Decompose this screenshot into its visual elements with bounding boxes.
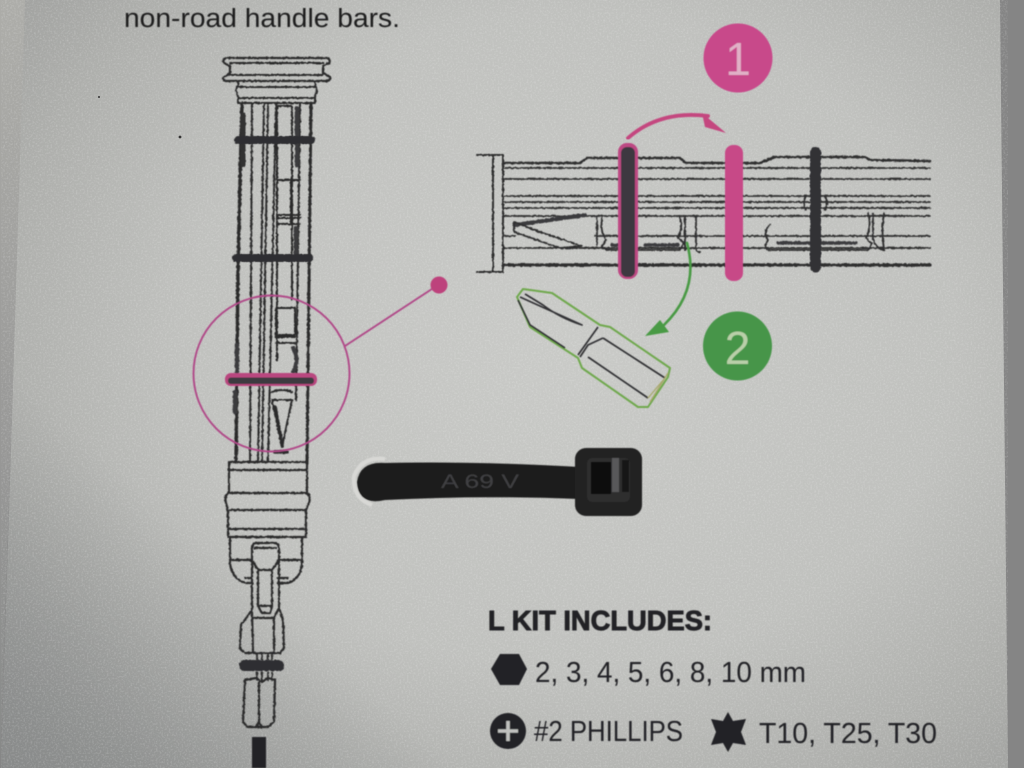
tool collar [225, 462, 310, 583]
rubber band: lower [239, 660, 284, 671]
bit with green outline [517, 289, 670, 407]
strap [357, 462, 580, 501]
icon: hex [491, 654, 527, 685]
rubber band: middle [232, 254, 313, 262]
step badge 2: 2 [725, 322, 750, 374]
icon: phillips [490, 713, 526, 749]
step badge 1 [704, 24, 772, 92]
tool body [235, 103, 311, 462]
black band on bar [810, 147, 821, 272]
step badge 2 [703, 312, 772, 380]
specks [98, 96, 181, 138]
bit details [515, 215, 585, 225]
kit contents [488, 605, 937, 752]
black bar at bottom [252, 737, 266, 768]
tie head [575, 448, 642, 516]
horizontal tool detail [477, 155, 930, 272]
long rails [505, 157, 930, 163]
die-cut recess [354, 459, 385, 505]
rubber band: highlighted pink [225, 373, 317, 386]
kit heading: L KIT INCLUDES: [488, 605, 712, 636]
bit holder [240, 543, 284, 653]
cable tie sample [354, 448, 642, 516]
torx sizes: T10, T25, T30 [759, 718, 937, 750]
step badge 1: 1 [725, 33, 751, 85]
hex bit [243, 653, 275, 727]
tool illustration: vertical multi-tool [223, 58, 330, 727]
pink band on bar (new position) [725, 145, 743, 281]
hex sizes: 2, 3, 4, 5, 6, 8, 10 mm [535, 657, 806, 689]
icon: torx [711, 712, 746, 752]
end cap [477, 155, 503, 272]
pink band on bar (old position) [618, 143, 638, 279]
arrow 1: pink band move [628, 113, 726, 138]
tool head [223, 58, 330, 103]
phillips label: #2 PHILLIPS [534, 716, 683, 748]
arrow 2: green bit insert [645, 243, 690, 336]
strap marking: A 69 V [441, 472, 519, 493]
rubber band: top [234, 136, 315, 144]
intro text fragment: non-road handle bars. [124, 5, 400, 33]
detail circle and callout line [194, 276, 448, 452]
